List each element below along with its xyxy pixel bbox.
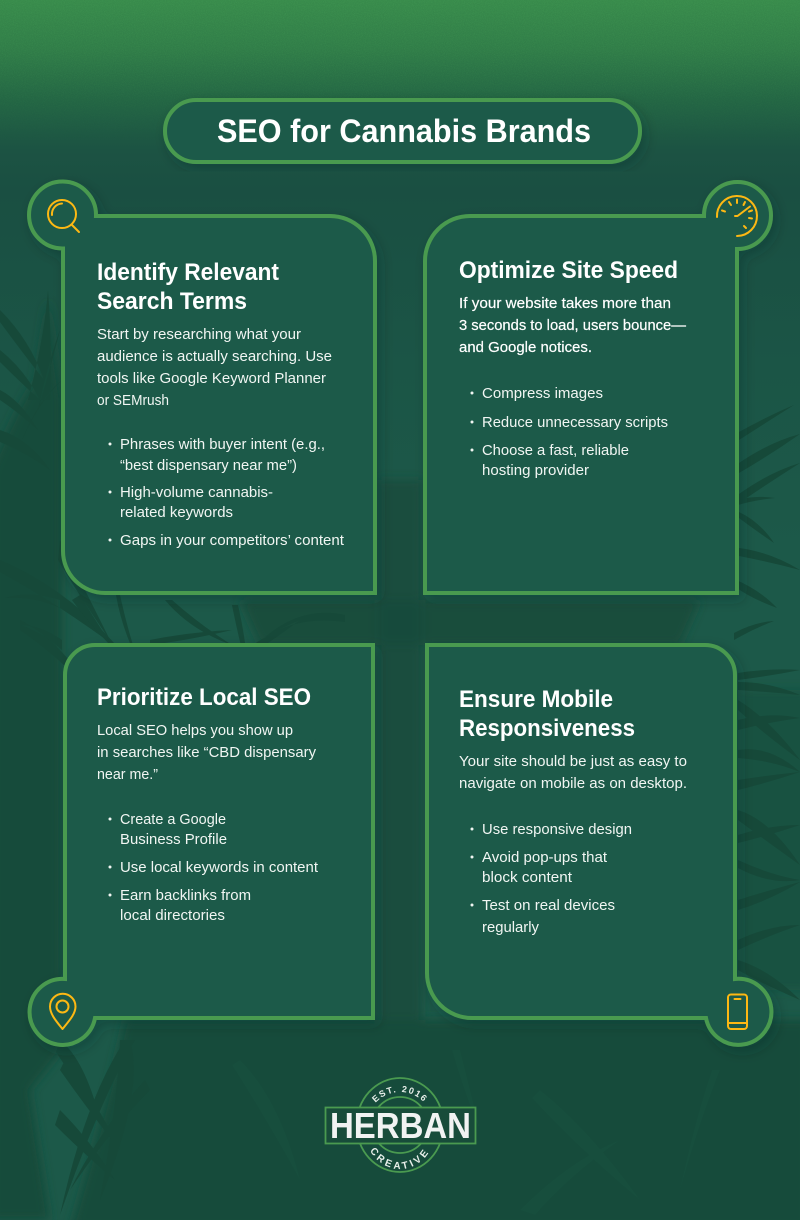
logo: herban creative: CREATIVE xyxy=(371,1148,428,1170)
bullet list: Earn backlinks from xyxy=(120,887,251,904)
text: intro: near me.” xyxy=(97,766,158,783)
bullet list: Business Profile xyxy=(120,831,227,848)
text: intro: tools like Google Keyword Planner xyxy=(97,370,326,387)
icon: smartphone xyxy=(728,994,747,1029)
text: intro: Local SEO helps you show up xyxy=(97,722,293,739)
text: intro xyxy=(97,722,316,783)
bullet list: Compress images xyxy=(482,385,603,402)
bullet list: regularly xyxy=(482,919,539,936)
icon: map pin xyxy=(50,994,76,1029)
text: intro: 3 seconds to load, users bounce— xyxy=(459,317,686,334)
icon: speedometer xyxy=(717,196,757,236)
title pill xyxy=(165,100,640,162)
bullet list: hosting provider xyxy=(482,462,589,479)
logo: herban creative: EST. 2016 xyxy=(372,1086,427,1102)
bullet list: Gaps in your competitors’ content xyxy=(120,532,345,549)
bullet list: Create a Google xyxy=(120,811,226,828)
heading: identify relevant search terms: Search Terms xyxy=(97,288,247,315)
text: intro: If your website takes more than xyxy=(459,295,671,312)
bullet list: Avoid pop-ups that xyxy=(482,849,608,866)
bullet list: Choose a fast, reliable xyxy=(482,442,629,459)
text: intro: Your site should be just as easy to xyxy=(459,753,687,770)
text: intro: in searches like “CBD dispensary xyxy=(97,744,316,761)
logo: herban creative xyxy=(324,1077,476,1173)
heading: prioritize local seo: Prioritize Local SEO xyxy=(97,684,311,711)
bullet list: Test on real devices xyxy=(482,897,615,914)
heading: ensure mobile responsiveness: Responsiveness xyxy=(459,715,635,742)
bullet list xyxy=(470,385,668,479)
background xyxy=(0,0,800,248)
background: cannabis foliage xyxy=(0,290,800,1220)
bullet list: local directories xyxy=(120,907,225,924)
bullet list: Use local keywords in content xyxy=(120,859,319,876)
panel: identify relevant search terms xyxy=(29,182,375,593)
bullet list xyxy=(108,811,319,924)
panel: ensure mobile responsiveness xyxy=(427,645,771,1045)
text: intro: audience is actually searching. Use xyxy=(97,348,332,365)
text: intro: and Google notices. xyxy=(459,339,592,356)
bullet list: block content xyxy=(482,869,573,886)
text: intro: Start by researching what your xyxy=(97,326,301,343)
panel: optimize site speed xyxy=(425,182,771,593)
text: intro xyxy=(459,753,687,792)
bullet list: Phrases with buyer intent (e.g., xyxy=(120,436,325,453)
text: intro: or SEMrush xyxy=(97,392,169,409)
heading: optimize site speed: Optimize Site Speed xyxy=(459,257,678,284)
bullet list: “best dispensary near me”) xyxy=(120,457,297,474)
text: intro xyxy=(459,295,686,356)
bullet list: High-volume cannabis- xyxy=(120,484,273,501)
title pill: SEO for Cannabis Brands xyxy=(217,113,591,149)
text: intro: navigate on mobile as on desktop. xyxy=(459,775,687,792)
icon: magnifying glass xyxy=(48,200,79,232)
heading: ensure mobile responsiveness xyxy=(459,686,635,742)
bullet list: Reduce unnecessary scripts xyxy=(482,414,668,431)
bullet list: Use responsive design xyxy=(482,821,632,838)
bullet list xyxy=(108,436,345,549)
bullet list: related keywords xyxy=(120,504,233,521)
logo: herban creative: HERBAN xyxy=(330,1105,471,1146)
heading: identify relevant search terms: Identify Relevant xyxy=(97,259,279,286)
bullet list xyxy=(470,821,632,936)
text: intro xyxy=(97,326,332,409)
panel: prioritize local seo xyxy=(30,645,373,1045)
heading: identify relevant search terms xyxy=(97,259,279,315)
heading: ensure mobile responsiveness: Ensure Mobile xyxy=(459,686,613,713)
